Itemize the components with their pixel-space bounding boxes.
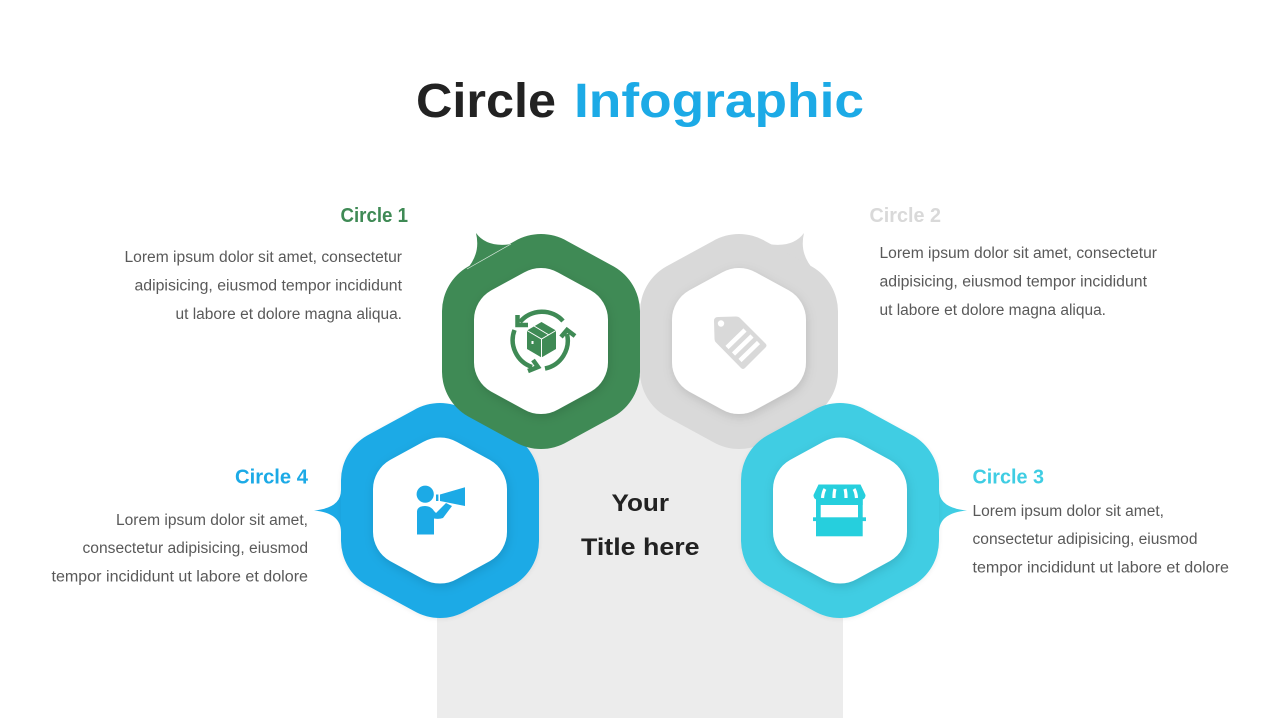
center title: Your: [612, 490, 669, 517]
panel: circle 2 hexagon: [640, 233, 838, 449]
title: Infographic: [574, 75, 864, 128]
heading: circle 4: Circle 4: [235, 466, 309, 488]
title: Circle: [416, 75, 556, 128]
text block: circle 2: ut labore et dolore magna aliqua.: [880, 302, 1106, 319]
text block: circle 1: [124, 249, 403, 323]
panel: circle 3 hexagon: [741, 403, 967, 618]
text block: circle 3: Lorem ipsum dolor sit amet,: [972, 503, 1164, 520]
center title: [581, 490, 700, 561]
heading: circle 3: Circle 3: [972, 466, 1044, 488]
title: [416, 75, 864, 128]
panel: circle 4 hexagon: [314, 403, 539, 618]
center background panel: [437, 375, 843, 718]
center title: Title here: [581, 534, 700, 561]
heading: circle 1: Circle 1: [340, 205, 408, 227]
icon: market stall: [813, 484, 866, 536]
icon: box with cycle arrows: [513, 312, 575, 371]
text block: circle 1: ut labore et dolore magna aliqua.: [176, 306, 402, 323]
text block: circle 3: [972, 503, 1229, 576]
text block: circle 4: consectetur adipisicing, eiusmod: [82, 540, 308, 557]
heading: circle 2: Circle 2: [870, 205, 941, 227]
text block: circle 1: adipisicing, eiusmod tempor incididunt: [134, 278, 403, 294]
text block: circle 4: Lorem ipsum dolor sit amet,: [116, 512, 308, 529]
text block: circle 3: consectetur adipisicing, eiusmod: [972, 531, 1198, 548]
icon: price tag: [714, 316, 766, 369]
text block: circle 3: tempor incididunt ut labore et dolore: [972, 560, 1229, 576]
text block: circle 4: tempor incididunt ut labore et dolore: [52, 568, 308, 586]
text block: circle 2: adipisicing, eiusmod tempor incididunt: [880, 274, 1148, 290]
text block: circle 4: [52, 512, 308, 586]
icon: person with megaphone: [417, 486, 465, 534]
panel: circle 1 hexagon: [442, 233, 640, 449]
text block: circle 2: Lorem ipsum dolor sit amet, consectetur: [880, 245, 1157, 262]
text block: circle 1: Lorem ipsum dolor sit amet, consectetur: [124, 249, 402, 266]
text block: circle 2: [880, 245, 1157, 319]
